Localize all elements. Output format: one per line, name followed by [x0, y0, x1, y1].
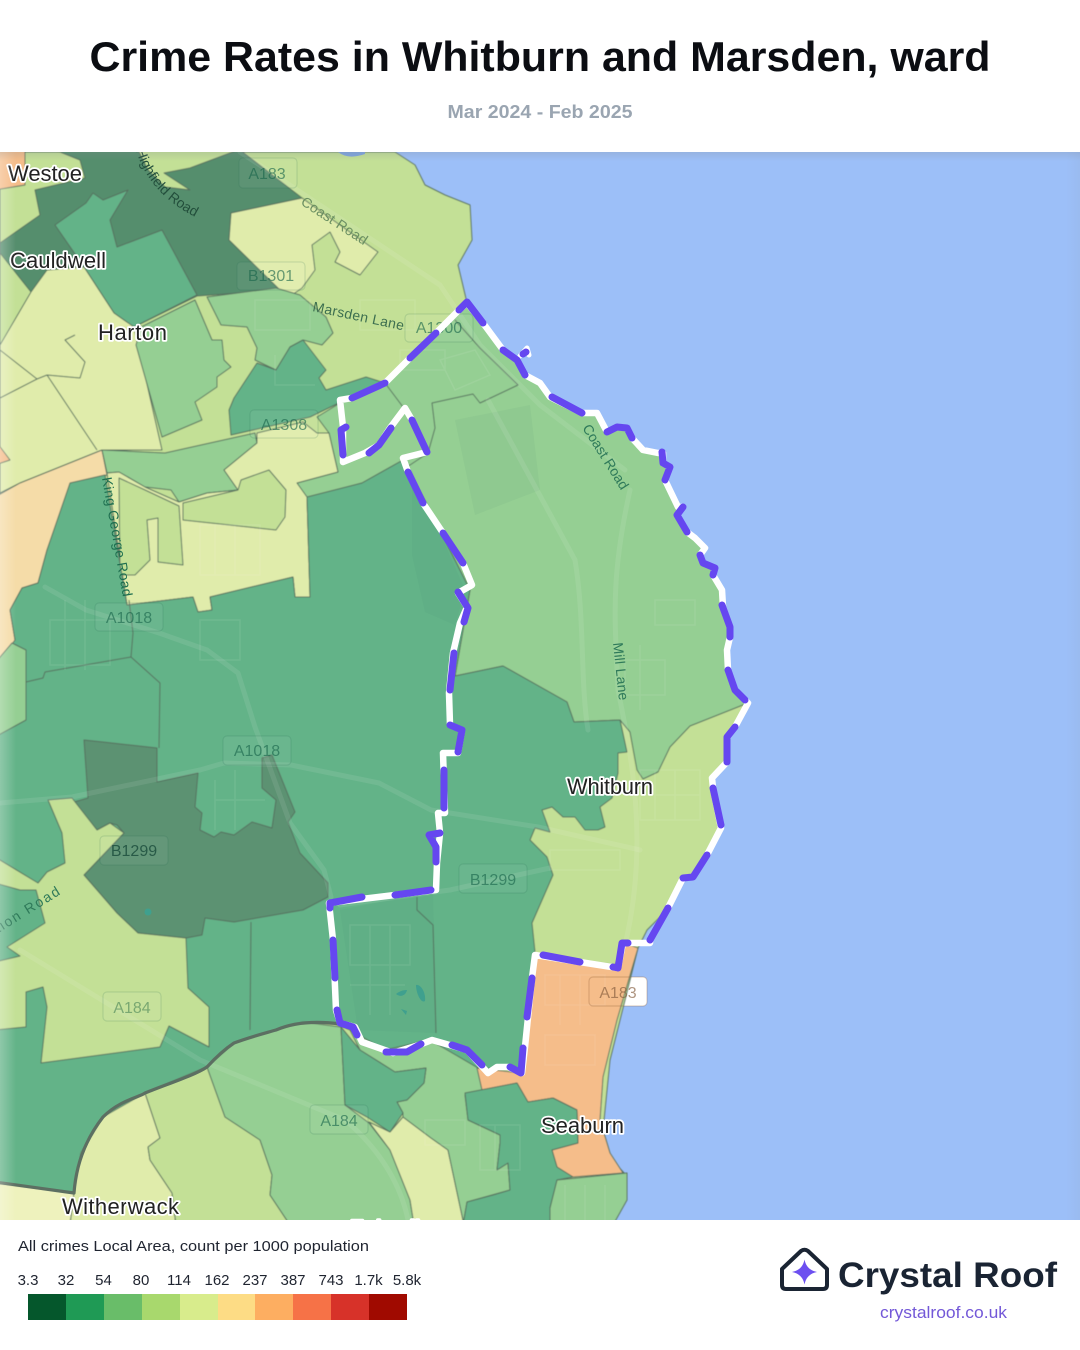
place: Witherwack: Witherwack	[62, 1194, 180, 1219]
shield: A1308: A1308	[261, 417, 307, 434]
legend tick labels: 162	[204, 1272, 230, 1289]
shield: B1301: B1301	[248, 268, 294, 285]
shield: B1301	[237, 262, 305, 290]
shield: A183 Seaburn: A183	[599, 985, 637, 1002]
logo wordmark: Crystal Roof	[838, 1256, 1057, 1295]
ward boundary: offshore islet	[520, 348, 529, 356]
legend tick labels: 80	[133, 1272, 149, 1289]
area: dark green south-west	[74, 740, 328, 938]
area: Seaburn orange	[477, 943, 638, 1177]
ward boundary: white line	[329, 303, 748, 1073]
website link: crystalroof.co.uk	[880, 1304, 1008, 1322]
area: mid green west edge	[0, 643, 26, 737]
area: south of thick road, light	[0, 1184, 74, 1220]
map edge fades	[0, 152, 16, 1220]
shield: A184 south: A184	[320, 1113, 358, 1130]
shield: A184 south	[310, 1105, 368, 1134]
area: Station Road green	[0, 883, 45, 962]
title: Crime Rates in Whitburn and Marsden, ward	[90, 33, 991, 80]
road names	[0, 152, 630, 932]
road shields	[95, 158, 647, 1134]
legend tick labels: 1.7k	[354, 1272, 383, 1289]
shield: A1018 central: A1018	[234, 743, 280, 760]
legend tick labels: 54	[95, 1272, 112, 1289]
area: mid green Harton east	[136, 300, 231, 437]
area: south-east mid green	[550, 1173, 627, 1225]
road name: Coast Road east: Coast Road	[579, 421, 632, 492]
shield: B1299 east	[459, 864, 527, 893]
roads and streets	[0, 152, 640, 1220]
darker tinted fields	[340, 405, 540, 1033]
place: Seaburn: Seaburn	[541, 1113, 624, 1138]
area: large green block	[0, 460, 627, 1193]
shield: B1299 east: B1299	[470, 872, 516, 889]
shield: B1299 west	[100, 836, 168, 865]
legend title: All crimes Local Area, count per 1000 population	[18, 1238, 369, 1255]
legend tick labels	[18, 1272, 422, 1289]
area: Seaburn green	[463, 1083, 578, 1225]
subtitle: date range: Mar 2024 - Feb 2025	[448, 102, 632, 122]
place: Harton: Harton	[98, 320, 167, 345]
thick boundary road	[0, 1022, 340, 1193]
place labels	[8, 161, 653, 1241]
shield: A1300: A1300	[416, 320, 462, 337]
shield: A183 Seaburn	[589, 977, 647, 1006]
sea	[394, 152, 1080, 1220]
area: band south of A1300	[102, 433, 257, 502]
area: light patch north of Marsden Lane	[229, 198, 378, 295]
area: light residential south	[107, 422, 338, 612]
shield: A1018 central	[223, 736, 291, 765]
legend tick labels: 5.8k	[393, 1272, 422, 1289]
road name: Marsden Lane: Marsden Lane	[311, 298, 406, 333]
legend tick labels: 387	[280, 1272, 306, 1289]
place: Cauldwell: Cauldwell	[10, 248, 106, 273]
legend tick labels: 743	[318, 1272, 344, 1289]
place: Westoe: Westoe	[8, 161, 82, 186]
shield: A184 west	[103, 992, 161, 1021]
area: coastal mid green	[297, 303, 748, 779]
area: medium green north	[55, 190, 197, 327]
area: mid green central north	[207, 288, 333, 370]
area: yellow green inset	[183, 470, 286, 530]
shield: A183 north	[239, 158, 297, 188]
road name: Highfield Road: Highfield Road	[136, 152, 199, 216]
legend tick labels: 3.3	[18, 1272, 38, 1289]
icon: house with star	[782, 1250, 827, 1289]
place: Whitburn: Whitburn	[567, 774, 653, 799]
road name: Coast Road north: Coast Road	[298, 193, 371, 248]
place: Fulwell (clipped): Fulwell	[350, 1216, 420, 1241]
area: western peach	[0, 450, 107, 665]
road name: Mill Lane: Mill Lane	[610, 642, 632, 701]
shield: A1018 west	[95, 603, 163, 631]
ponds	[144, 908, 425, 1015]
road shield under land: A183 white backing	[624, 977, 647, 1006]
legend	[18, 1238, 422, 1320]
area: medium green A1308	[229, 340, 385, 435]
shield: A184 west: A184	[113, 1000, 151, 1017]
shield: A1308	[250, 410, 318, 438]
legend tick labels: 32	[58, 1272, 74, 1289]
area: yellow hole near Highfield Road	[138, 150, 238, 190]
shield: B1299 west: B1299	[111, 843, 157, 860]
legend colour bar	[28, 1294, 407, 1320]
area: Westoe orange	[0, 150, 25, 190]
area boundary lines	[0, 320, 518, 1033]
area: Harton light	[0, 267, 162, 493]
ward boundary: purple dashes	[330, 302, 745, 1073]
legend tick labels: 237	[242, 1272, 268, 1289]
shield: A1018 west: A1018	[106, 610, 152, 627]
road name: King George Road: King George Road	[99, 476, 136, 598]
area: yellow green south-west	[0, 798, 209, 1063]
shield: A1300	[405, 314, 473, 342]
shield: A183 north: A183	[248, 166, 286, 183]
logo: Crystal Roof	[782, 1250, 1057, 1322]
area: dark green north	[0, 150, 302, 327]
legend tick labels: 114	[167, 1272, 191, 1289]
inlet	[338, 152, 365, 157]
land areas	[0, 150, 748, 1225]
